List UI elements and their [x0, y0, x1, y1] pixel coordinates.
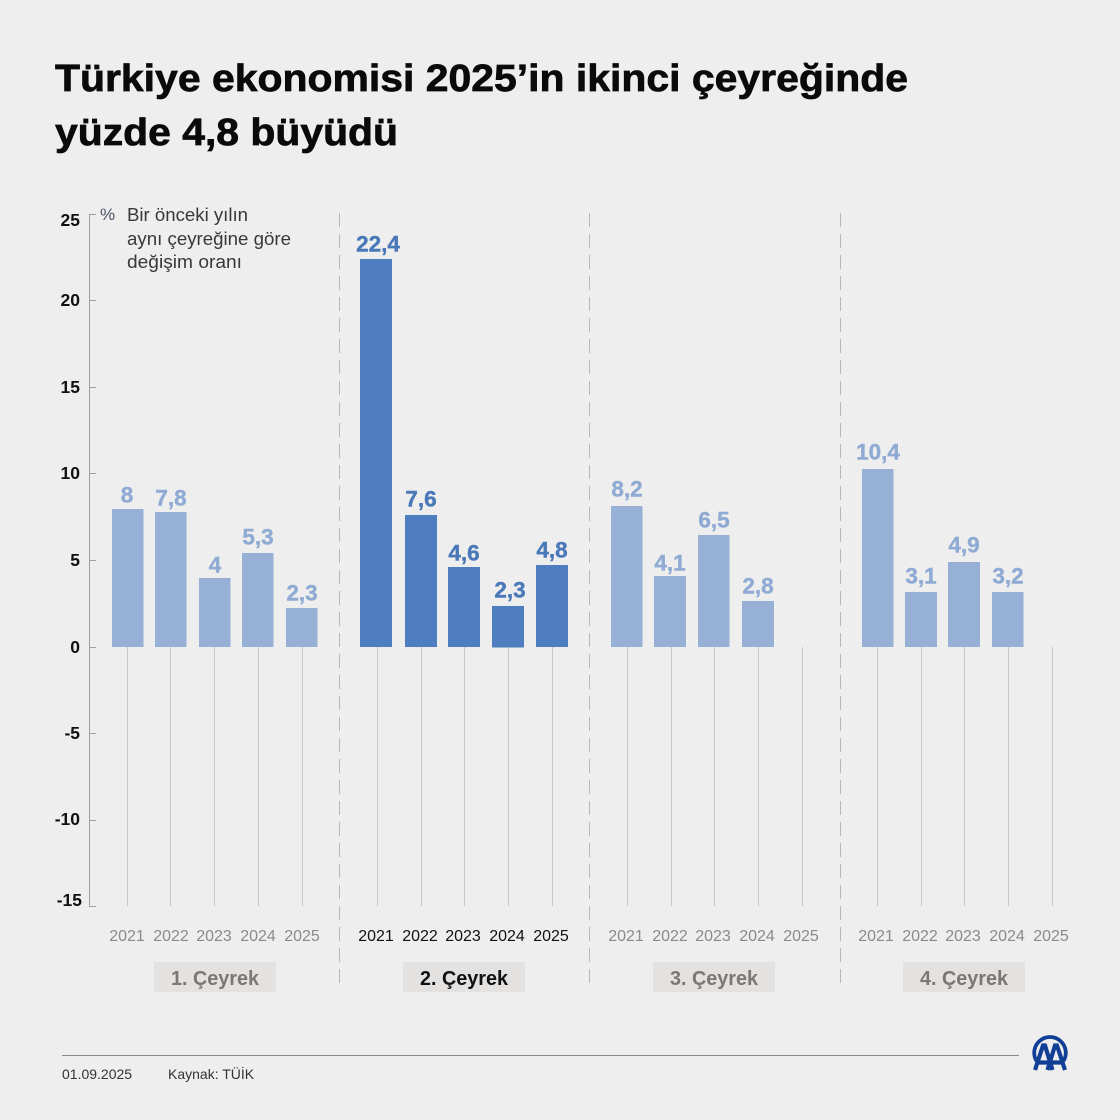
- values: 1. Çeyrek: 8: [121, 482, 133, 508]
- bars: 1. Çeyrek: [112, 509, 318, 647]
- years: 3. Çeyrek: 2024: [739, 928, 775, 945]
- y axis: 0: [70, 637, 80, 657]
- values: 3. Çeyrek: 4,1: [654, 550, 686, 576]
- years: 2. Çeyrek: 2025: [533, 928, 569, 945]
- years: 2. Çeyrek: 2024: [489, 928, 525, 945]
- years: 4. Çeyrek: 2024: [989, 928, 1025, 945]
- years: 3. Çeyrek: 2025: [783, 928, 819, 945]
- years: 2. Çeyrek: 2023: [445, 928, 481, 945]
- values: 3. Çeyrek: 6,5: [698, 508, 730, 532]
- values: 4. Çeyrek: 3,2: [992, 564, 1024, 588]
- panel: 1. Çeyrek: [109, 482, 320, 992]
- date: 01.09.2025: [62, 1066, 132, 1082]
- values: 1. Çeyrek: [121, 482, 318, 606]
- label: 3. Çeyrek: [653, 962, 775, 992]
- label: 1. Çeyrek: 1. Çeyrek: [171, 968, 260, 990]
- panel: 3. Çeyrek: [608, 476, 819, 992]
- values: 2. Çeyrek: 2,3: [494, 578, 526, 602]
- values: 3. Çeyrek: [611, 476, 774, 598]
- years: 3. Çeyrek: 2021: [608, 928, 644, 945]
- values: 2. Çeyrek: 4,6: [448, 540, 480, 566]
- label: 2. Çeyrek: 2. Çeyrek: [420, 968, 509, 990]
- years: 1. Çeyrek: 2023: [196, 928, 232, 945]
- title: Türkiye ekonomisi 2025’in ikinci çeyreğinde: [55, 58, 908, 100]
- values: 4. Çeyrek: [856, 440, 1024, 588]
- unit note: aynı çeyreğine göre: [127, 229, 291, 249]
- title: [55, 58, 908, 154]
- years: 4. Çeyrek: 2022: [902, 928, 938, 945]
- y axis: [55, 210, 96, 910]
- years: 1. Çeyrek: [109, 928, 320, 945]
- values: 3. Çeyrek: 8,2: [611, 476, 643, 502]
- years: 1. Çeyrek: 2024: [240, 928, 276, 945]
- y axis: 10: [61, 463, 80, 483]
- y axis: -10: [55, 809, 80, 829]
- years: 4. Çeyrek: [858, 928, 1069, 945]
- label: 2. Çeyrek: [403, 962, 525, 992]
- values: 2. Çeyrek: [356, 232, 568, 602]
- years: 3. Çeyrek: 2022: [652, 928, 688, 945]
- icon: AA logo: [1034, 1037, 1066, 1070]
- label: 4. Çeyrek: [903, 962, 1025, 992]
- label: 4. Çeyrek: 4. Çeyrek: [920, 968, 1009, 990]
- values: 1. Çeyrek: 2,3: [286, 580, 318, 606]
- bars: 4. Çeyrek: [862, 469, 1024, 647]
- year gridlines: [128, 647, 1052, 906]
- years: 3. Çeyrek: 2023: [695, 928, 731, 945]
- quarter dividers: [340, 213, 840, 990]
- footer: [62, 1056, 1019, 1082]
- label: 1. Çeyrek: [154, 962, 276, 992]
- y axis: -5: [64, 723, 80, 743]
- years: 3. Çeyrek: [608, 928, 819, 945]
- y axis: -15: [57, 890, 82, 910]
- values: 2. Çeyrek: 7,6: [405, 486, 437, 512]
- years: 2. Çeyrek: [358, 928, 569, 945]
- bars: 3. Çeyrek: [611, 506, 774, 647]
- y axis: 20: [61, 290, 80, 310]
- years: 1. Çeyrek: 2022: [153, 928, 189, 945]
- years: 4. Çeyrek: 2025: [1033, 928, 1069, 945]
- y axis: 15: [61, 377, 80, 397]
- values: 4. Çeyrek: 4,9: [948, 532, 980, 558]
- unit note: [100, 205, 291, 272]
- unit note: değişim oranı: [127, 252, 242, 272]
- source: Kaynak: TÜİK: [168, 1065, 255, 1082]
- values: 2. Çeyrek: 22,4: [356, 232, 400, 256]
- unit note: %: [100, 205, 115, 224]
- values: 1. Çeyrek: 4: [209, 552, 222, 578]
- values: 3. Çeyrek: 2,8: [742, 574, 774, 598]
- label: 3. Çeyrek: 3. Çeyrek: [670, 968, 759, 990]
- panel: 2. Çeyrek: [356, 232, 569, 992]
- values: 4. Çeyrek: 10,4: [856, 440, 900, 464]
- years: 1. Çeyrek: 2025: [284, 928, 320, 945]
- y axis: 25: [61, 210, 80, 230]
- panel: 4. Çeyrek: [856, 440, 1069, 992]
- years: 2. Çeyrek: 2022: [402, 928, 438, 945]
- values: 2. Çeyrek: 4,8: [536, 538, 568, 562]
- values: 1. Çeyrek: 7,8: [155, 486, 187, 510]
- years: 4. Çeyrek: 2021: [858, 928, 894, 945]
- unit note: Bir önceki yılın: [127, 205, 248, 225]
- years: 2. Çeyrek: 2021: [358, 928, 394, 945]
- values: 4. Çeyrek: 3,1: [905, 564, 937, 588]
- years: 4. Çeyrek: 2023: [945, 928, 981, 945]
- years: 1. Çeyrek: 2021: [109, 928, 145, 945]
- bars: 2. Çeyrek: [360, 259, 568, 648]
- values: 1. Çeyrek: 5,3: [242, 524, 274, 550]
- title: yüzde 4,8 büyüdü: [55, 112, 398, 154]
- y axis: 5: [70, 550, 80, 570]
